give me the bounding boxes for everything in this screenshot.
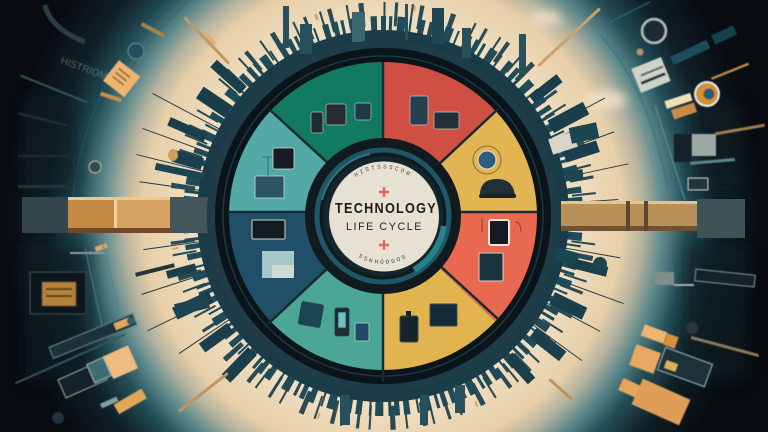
icon group: teal segment devices xyxy=(255,148,294,198)
wheel segments xyxy=(229,62,537,370)
clouds xyxy=(529,11,627,109)
panel: left technical machinery xyxy=(15,0,217,424)
icon group: yellow segment devices xyxy=(473,146,516,198)
radial city skyline xyxy=(173,6,593,426)
left horizontal column xyxy=(22,197,220,233)
icon: top red plus xyxy=(379,187,389,197)
top towers xyxy=(178,4,601,425)
right horizontal column xyxy=(561,199,745,238)
center hub ring xyxy=(305,138,461,294)
icon group: mint segment devices xyxy=(298,301,369,341)
panel: left technical machinery: HISTRIOM xyxy=(59,55,109,83)
segment: navy, left lower xyxy=(229,213,326,320)
panel: lower left screen xyxy=(30,272,86,314)
icon group: green segment devices xyxy=(311,103,371,133)
segment: coral, right lower xyxy=(440,213,537,322)
side towers xyxy=(135,122,607,316)
icon group: red segment devices xyxy=(410,96,459,129)
curved top caption: HISTSSSCOR xyxy=(354,164,410,177)
subtitle: Life Cycle: LIFE CYCLE xyxy=(346,221,423,233)
thin radial spikes xyxy=(136,93,629,361)
wheel outer ring xyxy=(207,40,559,392)
curved bottom caption: SSHHOOGOS xyxy=(358,254,406,264)
panel: lower right controls xyxy=(618,269,759,425)
icon: bottom red plus xyxy=(379,240,389,250)
segment: mint, bottom left xyxy=(272,270,382,370)
segment: red, top right xyxy=(384,62,495,162)
panel: right technical machinery xyxy=(600,2,765,425)
side building blocks xyxy=(166,60,608,384)
center disc xyxy=(329,162,439,272)
segment: green, top left xyxy=(272,62,382,161)
shadow haze behind machinery xyxy=(25,95,745,380)
icon group: bottom yellow segment devices xyxy=(400,304,457,342)
segment: teal, left upper xyxy=(229,112,326,214)
segment dividers xyxy=(228,62,538,382)
icon group: coral segment devices xyxy=(479,218,521,281)
segment: yellow, bottom right xyxy=(384,268,496,370)
segment: yellow, right upper xyxy=(441,112,537,214)
title: Technology: TECHNOLOGY xyxy=(335,200,437,217)
icon group: navy segment devices xyxy=(252,220,294,278)
